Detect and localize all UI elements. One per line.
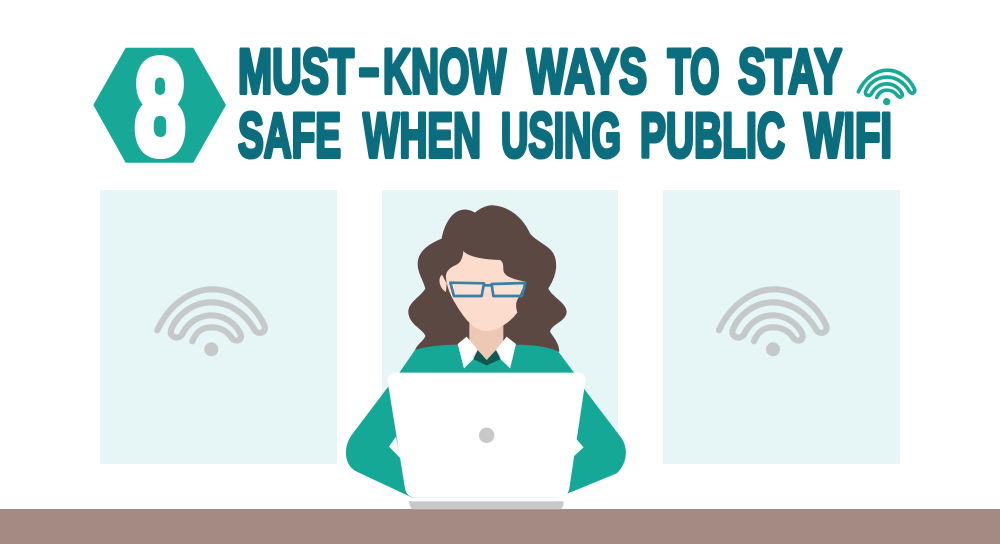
title: KNOW <box>383 37 506 107</box>
hexagon badge with number 8 <box>93 32 226 181</box>
hair <box>408 205 567 352</box>
title <box>238 34 892 171</box>
face <box>446 251 526 331</box>
laptop base <box>409 501 564 509</box>
ear <box>439 275 447 292</box>
title: WHEN <box>363 101 481 171</box>
woman with laptop illustration <box>346 205 626 509</box>
icon: grey wifi left <box>157 289 265 356</box>
title: TO <box>668 37 720 107</box>
sweater and arms <box>346 345 626 497</box>
title: SAFE <box>238 101 341 171</box>
icon: grey wifi right <box>719 289 827 356</box>
title: WIFI <box>804 101 892 171</box>
desk <box>0 509 1000 544</box>
panel: left window <box>100 190 337 464</box>
title: STAY <box>738 37 842 107</box>
panel: right window <box>663 190 900 464</box>
title: USING <box>501 101 621 171</box>
icon: teal wifi in title <box>858 70 915 105</box>
title: MUST <box>238 37 354 107</box>
dark neckline <box>473 350 501 366</box>
hexagon badge with number 8: 8 <box>135 32 185 181</box>
neck <box>469 318 503 366</box>
glasses <box>450 283 525 296</box>
arm notches <box>389 437 584 459</box>
title: - <box>358 34 380 101</box>
laptop lid <box>388 373 585 497</box>
panel: centre window <box>382 190 618 464</box>
title: PUBLIC <box>640 101 785 171</box>
title: WAYS <box>527 37 647 107</box>
collar <box>458 337 516 368</box>
laptop logo <box>479 428 494 443</box>
